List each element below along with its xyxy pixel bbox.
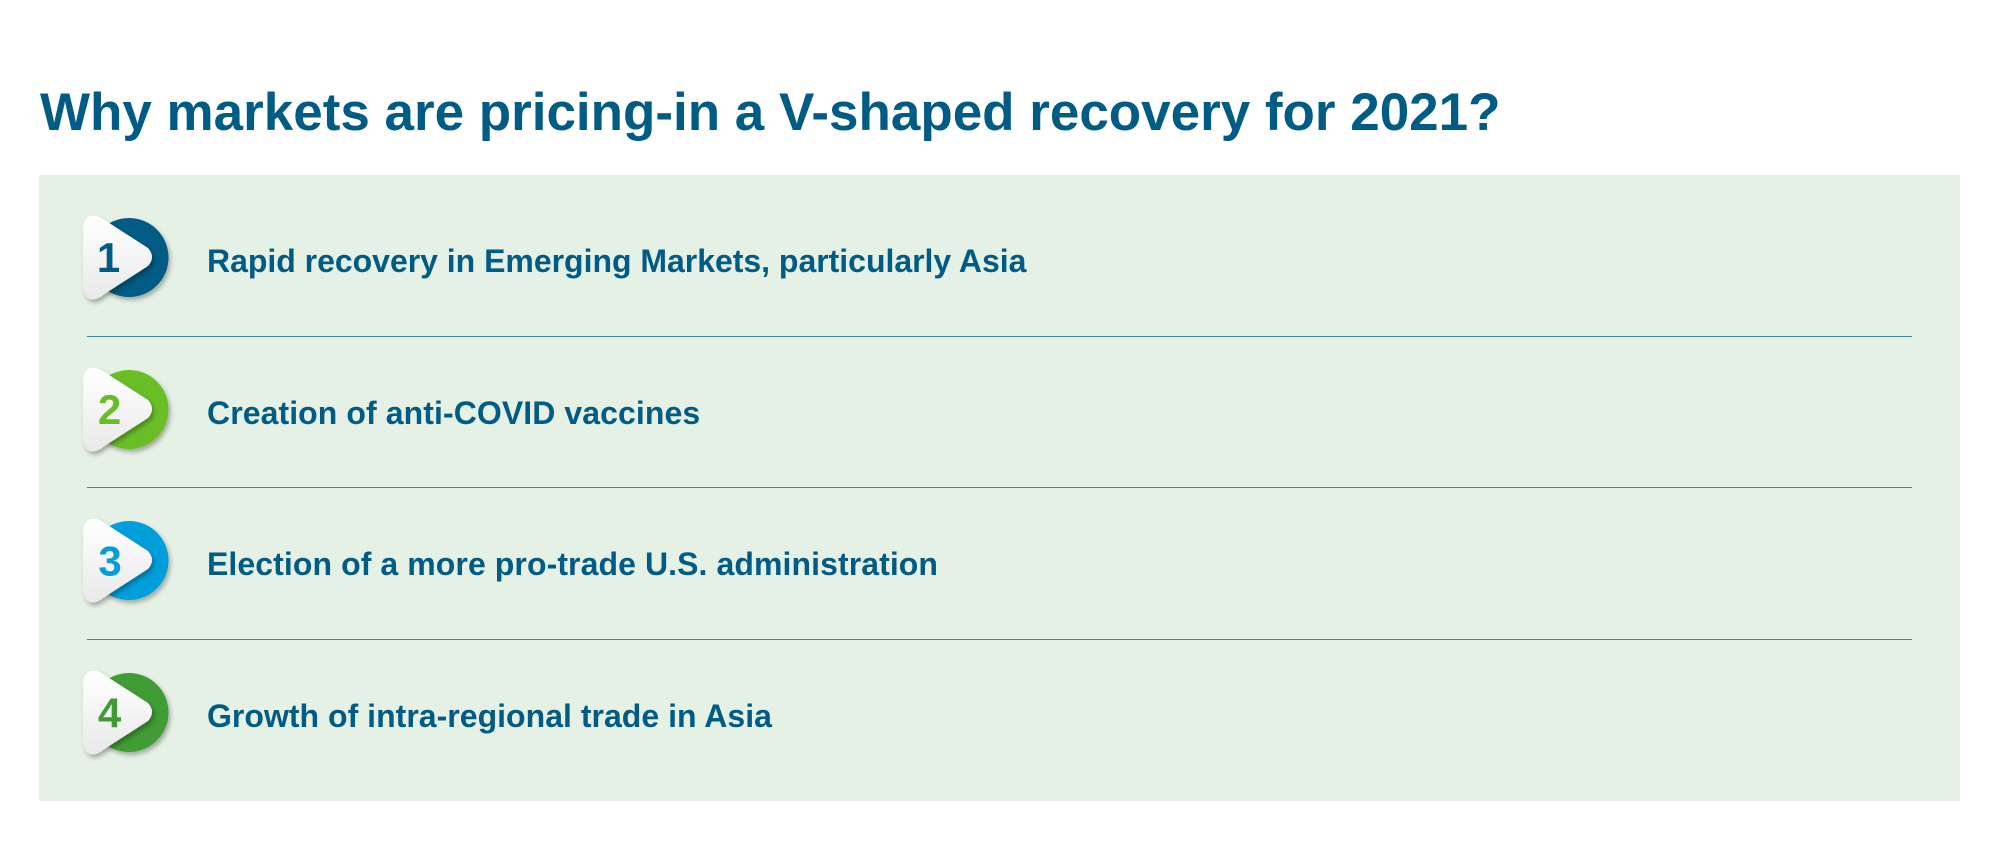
icon: number 1 xyxy=(83,216,168,300)
text: reason 4: Growth of intra-regional trade in Asia xyxy=(207,698,772,734)
text: reason 2: Creation of anti-COVID vaccines xyxy=(207,395,700,431)
icon: number 3: 3 xyxy=(98,538,122,584)
icon: number 3 xyxy=(83,519,168,603)
text: reason 1: Rapid recovery in Emerging Markets, particularly Asia xyxy=(207,243,1026,279)
panel: reasons list xyxy=(39,175,1960,801)
title: Why markets are pricing-in a V-shaped recovery for 2021? xyxy=(40,83,1500,142)
icon: number 2 xyxy=(83,368,168,452)
icon: number 4 xyxy=(83,671,168,755)
text: reason 3: Election of a more pro-trade U.S. administration xyxy=(207,546,938,582)
icon: number 4: 4 xyxy=(98,690,122,736)
icon: number 1: 1 xyxy=(97,234,120,281)
icon: number 2: 2 xyxy=(98,386,121,433)
